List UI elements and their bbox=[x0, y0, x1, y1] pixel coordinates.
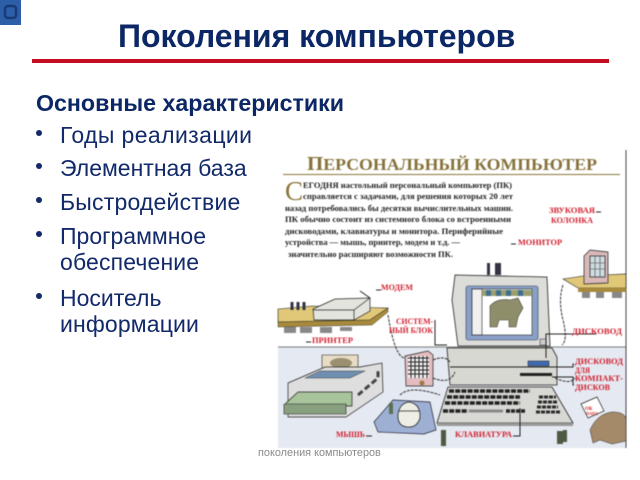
red labels: НЫЙ БЛОК bbox=[389, 326, 433, 335]
red labels: ДИСКОВОД bbox=[575, 357, 624, 366]
poster paragraph: устройства — мышь, принтер, модем и т.д. — bbox=[285, 238, 461, 247]
poster paragraph: ЕГОДНЯ настольный персональный компьютер (ПК) bbox=[303, 181, 512, 190]
red labels: ПРИНТЕР bbox=[312, 336, 353, 345]
cables bbox=[388, 315, 575, 395]
bullet list: Носитель bbox=[60, 285, 161, 311]
poster paragraph bbox=[285, 176, 513, 259]
poster paragraph: значительно расширяют возможности ПК. bbox=[288, 250, 453, 259]
keyboard bbox=[437, 387, 573, 426]
title: Поколения компьютеров bbox=[118, 18, 515, 54]
monitor bbox=[452, 275, 550, 346]
printer bbox=[284, 355, 383, 417]
poster paragraph: ПК обычно состоит из системного блока со встроенными bbox=[285, 215, 511, 224]
bullet list: Быстродействие bbox=[60, 189, 240, 215]
shelf with speaker, right bbox=[560, 250, 626, 345]
bullet list: Программное bbox=[60, 223, 206, 249]
poster paragraph: С bbox=[285, 176, 303, 206]
red labels: МОДЕМ bbox=[381, 283, 413, 292]
mammoth with protest sign bbox=[581, 397, 626, 444]
red labels: ДИСКОВ bbox=[575, 383, 611, 392]
bullet list bbox=[36, 122, 252, 337]
small figures on floor bbox=[441, 430, 567, 446]
red labels: ДЛЯ bbox=[575, 366, 590, 375]
title underline bbox=[32, 59, 609, 62]
shelf with modem, left bbox=[278, 298, 388, 333]
people on top of monitor bbox=[487, 263, 501, 275]
red labels: МЫШЬ bbox=[336, 430, 365, 439]
poster heading: ПЕРСОНАЛЬНЫЙ КОМПЬЮТЕР bbox=[307, 153, 597, 175]
footer: поколения компьютеров bbox=[258, 447, 381, 459]
red labels bbox=[312, 206, 624, 439]
heading: main characteristics: Основные характеристики bbox=[36, 90, 344, 116]
bullet list: обеспечение bbox=[60, 249, 199, 275]
mammoth on screen bbox=[490, 298, 523, 327]
mammoth with protest sign: ОК bbox=[585, 407, 593, 412]
red labels: ДИСКОВОД bbox=[572, 327, 623, 336]
red labels: КЛАВИАТУРА bbox=[455, 430, 512, 439]
red labels: МОНИТОР bbox=[518, 238, 562, 247]
system unit bbox=[447, 348, 557, 385]
red labels: СИСТЕМ- bbox=[396, 317, 433, 326]
mouse and pad bbox=[374, 400, 436, 434]
floor background bbox=[278, 347, 626, 448]
callout lines bbox=[306, 212, 601, 436]
red labels: КОЛОНКА bbox=[551, 216, 593, 225]
bullet list: Годы реализации bbox=[60, 122, 252, 148]
poster paragraph: назад потребовались бы десятки вычислительных машин. bbox=[285, 204, 513, 213]
icon: corner badge bbox=[0, 0, 21, 25]
poster paragraph: дисководами, клавиатуры и монитора. Периферийные bbox=[285, 227, 503, 236]
red labels: КОМПАКТ- bbox=[575, 374, 623, 383]
red labels: ЗВУКОВАЯ bbox=[549, 206, 595, 215]
speaker, centre bbox=[405, 351, 433, 386]
mammoth with protest sign: ПАПА bbox=[586, 411, 598, 416]
poster paragraph: справляется с задачами, для решения которых 20 лет bbox=[303, 192, 513, 201]
bullet list: Элементная база bbox=[60, 155, 247, 181]
bullet list: информации bbox=[60, 311, 199, 337]
